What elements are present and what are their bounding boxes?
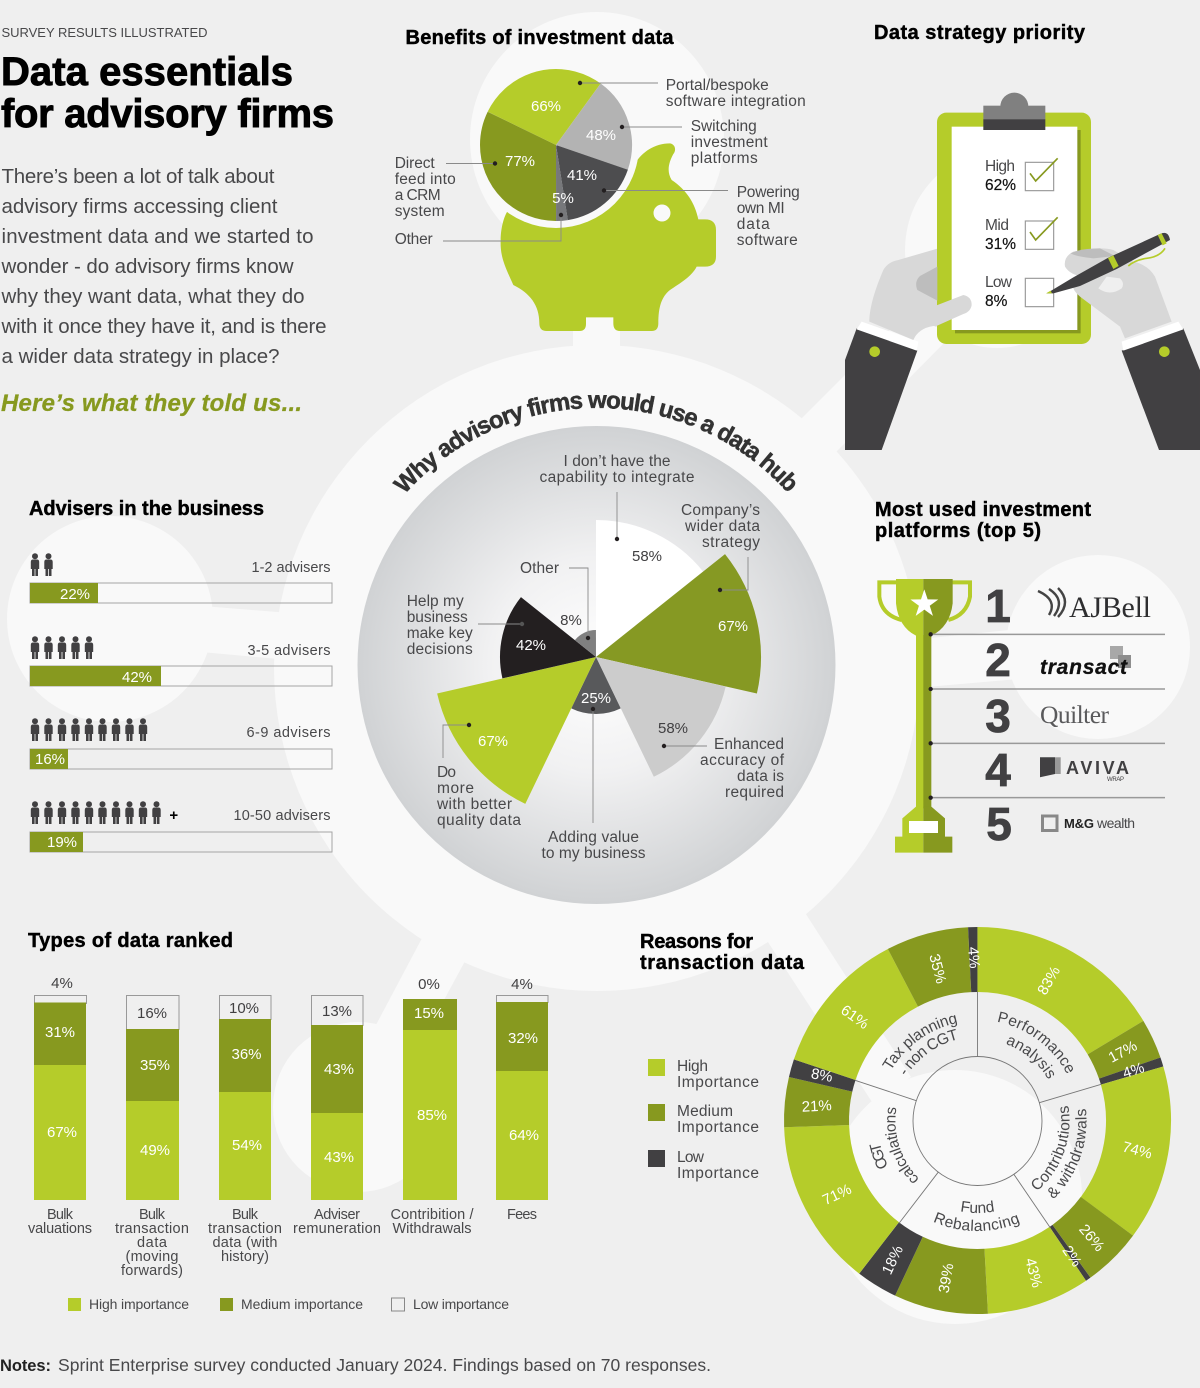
stacked bar: bulk transaction with history: data (with xyxy=(212,1235,278,1251)
logo: Quilter: Quilter xyxy=(1040,700,1110,729)
sunburst values: 74% xyxy=(1120,1139,1154,1163)
label: portal: Portal/bespoke xyxy=(666,77,769,94)
priority: high xyxy=(985,158,1016,194)
sunburst values: 4% xyxy=(964,946,983,969)
rank numbers: 4 xyxy=(985,744,1011,796)
label: better quality data: with better xyxy=(436,796,512,813)
panel: benefits of investment data xyxy=(395,27,806,331)
label: adding value xyxy=(542,829,646,862)
sunburst outer ring xyxy=(752,895,1200,1346)
label: direct feed: system xyxy=(395,203,445,220)
stacked bar: adviser remuneration: remuneration xyxy=(293,1221,381,1237)
pie values: 66% xyxy=(531,98,561,115)
notes: Notes: xyxy=(0,1357,51,1375)
right sleeve xyxy=(1122,322,1200,450)
heading: platforms: Most used investment xyxy=(875,499,1091,521)
legend: low xyxy=(648,1149,759,1182)
rank numbers: 5 xyxy=(986,798,1012,850)
label: key decisions: Help my xyxy=(407,593,464,610)
pen xyxy=(1046,233,1170,293)
bar: 6-9 advisers xyxy=(30,718,332,769)
intro text: investment data and we started to xyxy=(2,225,314,248)
stacked bar: bulk transaction moving forwards: Bulk xyxy=(139,1207,166,1223)
stacked bar: fees xyxy=(496,976,548,1223)
stacked bar: bulk valuations: 31% xyxy=(45,1024,75,1041)
priority: mid: 31% xyxy=(985,236,1016,253)
bar: 6-9 advisers: 16% xyxy=(35,751,65,768)
heading: platforms xyxy=(875,499,1091,542)
stacked bar: bulk valuations: valuations xyxy=(28,1221,92,1237)
priority: high: High xyxy=(985,158,1015,175)
stacked bar: contribution withdrawals: Contribition / xyxy=(390,1207,474,1223)
stacked bar: bulk transaction moving forwards xyxy=(115,996,189,1279)
label: powering: own MI xyxy=(737,200,785,217)
legend: importance xyxy=(68,1296,509,1312)
label: direct feed xyxy=(395,155,456,220)
label: powering: Powering xyxy=(737,184,800,201)
label: other: Other xyxy=(395,231,433,248)
bar: 10-50 advisers xyxy=(30,801,332,852)
stacked bar: contribution withdrawals: 85% xyxy=(417,1107,447,1124)
label: key decisions: make key xyxy=(407,625,473,642)
stacked bar: contribution withdrawals: 0% xyxy=(418,976,440,993)
stacked bar: bulk transaction moving forwards: data xyxy=(137,1235,168,1251)
stacked bar: adviser remuneration: 13% xyxy=(322,1003,352,1020)
heading: reasons xyxy=(640,931,805,974)
label: key decisions: business xyxy=(407,609,468,626)
heading: advisers: Advisers in the business xyxy=(29,498,264,520)
bar: 10-50 advisers: + xyxy=(169,807,178,824)
stacked bar: bulk transaction with history: transaction xyxy=(208,1221,282,1237)
bar: 1-2 advisers: 1-2 advisers xyxy=(252,560,330,576)
stacked bar: fees: 64% xyxy=(509,1127,539,1144)
stacked bar: adviser remuneration xyxy=(293,996,381,1237)
panel: why advisory firms would use a data hub xyxy=(358,393,836,904)
polar values xyxy=(478,548,748,750)
panel: data strategy priority xyxy=(845,22,1200,450)
bar: 10-50 advisers: 19% xyxy=(47,834,77,851)
illustration: clipboard and hands xyxy=(845,93,1200,450)
legend: medium: Medium xyxy=(677,1103,733,1120)
label: wider data strategy: Company’s xyxy=(681,502,760,519)
stacked bar: bulk valuations xyxy=(28,975,92,1237)
icon: piggy bank xyxy=(501,143,716,331)
intro text: wonder - do advisory firms know xyxy=(0,255,294,278)
left thumb xyxy=(916,267,972,327)
stacked bar: adviser remuneration: 43% xyxy=(324,1149,354,1166)
stacked bar: adviser remuneration: Adviser xyxy=(314,1207,360,1223)
label: switching xyxy=(691,118,768,167)
label: enhanced accuracy: required xyxy=(725,784,784,801)
stacked bar: bulk transaction with history xyxy=(208,996,282,1265)
logo: Aviva: WRAP xyxy=(1107,777,1124,783)
clip xyxy=(983,93,1045,130)
heading: reasons: transaction data xyxy=(640,952,805,974)
stacked bar: fees: Fees xyxy=(507,1207,537,1223)
label: switching: Switching xyxy=(691,118,757,135)
polar leader lines xyxy=(443,492,748,823)
legend: low: Low xyxy=(677,1149,705,1166)
sunburst category labels: Tax planning xyxy=(882,1015,958,1068)
stacked bar: bulk valuations: 67% xyxy=(47,1124,77,1141)
stacked bar: contribution withdrawals: Withdrawals xyxy=(392,1221,472,1237)
logo: M&G wealth xyxy=(1042,815,1135,831)
label: better quality data: Do xyxy=(437,764,456,781)
tagline: Here’s what they told us... xyxy=(1,390,302,417)
sunburst values: 2% xyxy=(1059,1243,1085,1270)
bar: 3-5 advisers: 3-5 advisers xyxy=(248,643,330,659)
logo: M&G wealth: M&G xyxy=(1064,816,1094,831)
bar: 10-50 advisers: 10-50 advisers xyxy=(234,808,330,824)
sunburst category labels: Rebalancing xyxy=(934,1212,1020,1232)
label: better quality data: quality data xyxy=(437,812,521,829)
stacked bar: bulk transaction moving forwards: forwards) xyxy=(121,1263,183,1279)
label: direct feed: Direct xyxy=(395,155,435,172)
stacked bar: bulk transaction with history: 54% xyxy=(232,1137,262,1154)
bar: 1-2 advisers xyxy=(30,553,332,603)
paper shadow xyxy=(955,130,1081,333)
stacked bar: fees: 4% xyxy=(511,976,533,993)
priority: low: Low xyxy=(985,274,1013,291)
sunburst category labels: Fund xyxy=(961,1200,994,1214)
title: Data essentials xyxy=(1,50,293,94)
header block xyxy=(0,25,334,417)
priority: low xyxy=(985,274,1013,310)
sunburst category labels: Performance xyxy=(998,1012,1073,1073)
logo: AJ Bell xyxy=(1038,588,1151,624)
sunburst values: 61% xyxy=(837,1002,872,1033)
label: direct feed: feed into xyxy=(395,171,456,188)
label: switching: investment xyxy=(691,134,768,151)
stacked bar: contribution withdrawals: 15% xyxy=(414,1005,444,1022)
rank numbers: 1 xyxy=(985,580,1011,632)
sunburst category labels xyxy=(869,1012,1087,1232)
panel: advisers in the business xyxy=(29,498,332,852)
label: other: Other xyxy=(520,560,559,577)
sunburst category labels: calculations xyxy=(885,1107,918,1183)
label: better quality data xyxy=(436,764,521,829)
logo: transact: transact xyxy=(1040,656,1128,679)
sunburst category labels: & withdrawals xyxy=(1048,1109,1087,1198)
kicker: SURVEY RESULTS ILLUSTRATED xyxy=(2,25,208,40)
clipboard board xyxy=(937,113,1091,344)
pie chart: benefits xyxy=(503,92,609,198)
legend: high xyxy=(648,1058,759,1091)
heading: priority: Data strategy priority xyxy=(874,22,1086,44)
bar: 6-9 advisers: 6-9 advisers xyxy=(246,725,330,741)
paper xyxy=(952,127,1077,330)
stacked bar: bulk valuations: Bulk xyxy=(47,1207,74,1223)
label: portal xyxy=(666,77,806,110)
sunburst values: 35% xyxy=(925,952,949,986)
intro text: with it once they have it, and is there xyxy=(0,315,326,338)
legend: importance: High importance xyxy=(89,1296,189,1312)
bar: 3-5 advisers: 42% xyxy=(122,669,152,686)
bar: 3-5 advisers xyxy=(30,636,332,686)
legend: importance: Medium importance xyxy=(241,1296,363,1312)
pie values: 5% xyxy=(552,190,574,207)
priority: high: 62% xyxy=(985,177,1016,194)
heading: platforms: platforms (top 5) xyxy=(875,520,1041,542)
label: enhanced accuracy xyxy=(700,736,785,801)
polar values: 8% xyxy=(560,612,582,629)
stacked bar: adviser remuneration: 43% xyxy=(324,1061,354,1078)
rank numbers xyxy=(985,580,1012,850)
label: capability xyxy=(540,453,694,486)
stacked bar: bulk valuations: 4% xyxy=(51,975,73,992)
pie values: 48% xyxy=(586,127,616,144)
logo: Aviva: AVIVA xyxy=(1066,758,1129,778)
priority: mid xyxy=(985,217,1016,253)
panel: reasons for transaction data xyxy=(640,927,1172,1314)
intro text: There’s been a lot of talk about xyxy=(2,165,275,188)
label: wider data strategy xyxy=(681,502,760,551)
polar values: 58% xyxy=(632,548,662,565)
label: adding value: Adding value xyxy=(548,829,639,846)
stacked bar: bulk transaction moving forwards: transaction xyxy=(115,1221,189,1237)
sunburst values: 83% xyxy=(1034,963,1064,998)
stacked bar: bulk transaction with history: history) xyxy=(221,1249,269,1265)
intro text: advisory firms accessing client xyxy=(2,195,278,218)
label: direct feed: a CRM xyxy=(395,187,441,204)
label: wider data strategy: wider data xyxy=(684,518,760,535)
notes: Sprint Enterprise survey conducted January 2024. Findings based on 70 responses. xyxy=(58,1355,711,1375)
intro text: why they want data, what they do xyxy=(0,285,304,308)
intro text xyxy=(0,165,326,368)
rank numbers: 2 xyxy=(985,634,1011,686)
heading: reasons: Reasons for xyxy=(640,931,753,953)
label: switching: platforms xyxy=(691,150,758,167)
heading: benefits: Benefits of investment data xyxy=(406,27,674,49)
sunburst values: 43% xyxy=(1021,1256,1045,1290)
label: wider data strategy: strategy xyxy=(702,534,760,551)
label: powering: software xyxy=(737,232,798,249)
sunburst values: 71% xyxy=(820,1181,854,1209)
label: powering xyxy=(737,184,800,249)
sunburst category labels: analysis xyxy=(1006,1037,1054,1078)
sunburst values: 17% xyxy=(1106,1037,1140,1067)
check boxes xyxy=(1025,162,1054,307)
priority: mid: Mid xyxy=(985,217,1009,234)
icon: trophy xyxy=(879,579,1165,853)
sunburst values: 8% xyxy=(810,1065,834,1086)
intro text: a wider data strategy in place? xyxy=(2,345,280,368)
label: key decisions: decisions xyxy=(407,641,473,658)
curved heading: Why advisory firms would use a data hub xyxy=(392,393,796,492)
stacked bar: fees: 32% xyxy=(508,1030,538,1047)
pie leader lines xyxy=(443,81,728,241)
sunburst category labels: CGT xyxy=(869,1144,886,1169)
ticks xyxy=(1030,158,1058,240)
pie values: 41% xyxy=(567,167,597,184)
panel: most used investment platforms xyxy=(875,499,1165,853)
logo: transact xyxy=(1040,646,1131,679)
left sleeve xyxy=(845,322,918,450)
sunburst dividers and hub xyxy=(855,992,1101,1228)
label: key decisions xyxy=(407,593,473,658)
priority: low: 8% xyxy=(985,293,1008,310)
legend: importance: Low importance xyxy=(413,1296,509,1312)
polar values: 67% xyxy=(478,733,508,750)
sunburst values: 21% xyxy=(801,1097,832,1116)
label: powering: data xyxy=(737,216,770,233)
legend: medium: Importance xyxy=(677,1119,759,1136)
sunburst values: 39% xyxy=(936,1262,958,1294)
label: portal: software integration xyxy=(666,93,806,110)
legend: medium xyxy=(648,1103,759,1136)
bar: 1-2 advisers: 22% xyxy=(60,586,90,603)
sunburst values: 26% xyxy=(1075,1221,1108,1255)
legend: high: Importance xyxy=(677,1074,759,1091)
stacked bar: bulk transaction with history: 10% xyxy=(229,1000,259,1017)
label: enhanced accuracy: accuracy of xyxy=(700,752,785,769)
stacked bar: bulk transaction moving forwards: 16% xyxy=(137,1005,167,1022)
stacked bar: bulk transaction with history: 36% xyxy=(231,1046,262,1063)
right hand xyxy=(1065,248,1172,338)
sunburst category labels: Contributions xyxy=(1032,1106,1070,1190)
label: adding value: to my business xyxy=(542,845,646,862)
title xyxy=(1,50,334,136)
polar values: 25% xyxy=(581,690,611,707)
legend: high: High xyxy=(677,1058,708,1075)
left hand back xyxy=(869,248,938,340)
sunburst values: 4% xyxy=(1121,1059,1147,1082)
polar chart xyxy=(480,541,712,773)
heading: types: Types of data ranked xyxy=(28,930,233,952)
polar values: 42% xyxy=(516,637,546,654)
sunburst category labels: - non CGT xyxy=(902,1028,956,1074)
logo: AJ Bell: AJBell xyxy=(1069,591,1151,624)
logo: M&G wealth: wealth xyxy=(1096,815,1135,831)
stacked bar: bulk transaction moving forwards: (moving xyxy=(126,1249,178,1265)
label: capability: I don’t have the xyxy=(564,453,670,470)
label: better quality data: more xyxy=(437,780,474,797)
stacked bar: bulk transaction moving forwards: 35% xyxy=(140,1057,170,1074)
pie values: 77% xyxy=(505,153,535,170)
stacked bar: bulk transaction with history: Bulk xyxy=(232,1207,259,1223)
logo: Aviva xyxy=(1040,757,1129,783)
pie values xyxy=(505,98,616,207)
label: capability: capability to integrate xyxy=(540,469,694,486)
rank numbers: 3 xyxy=(985,690,1011,742)
stacked bar: bulk transaction moving forwards: 49% xyxy=(140,1142,170,1159)
label: enhanced accuracy: Enhanced xyxy=(714,736,784,753)
stacked bar: contribution withdrawals xyxy=(390,976,474,1237)
label: enhanced accuracy: data is xyxy=(737,768,784,785)
panel: types of data ranked xyxy=(28,930,548,1312)
hub disc xyxy=(358,426,836,904)
polar values: 67% xyxy=(718,618,748,635)
title: for advisory firms xyxy=(1,92,334,136)
sunburst values xyxy=(801,946,1154,1294)
polar values: 58% xyxy=(658,720,688,737)
legend: low: Importance xyxy=(677,1165,759,1182)
sunburst values: 18% xyxy=(879,1243,907,1277)
